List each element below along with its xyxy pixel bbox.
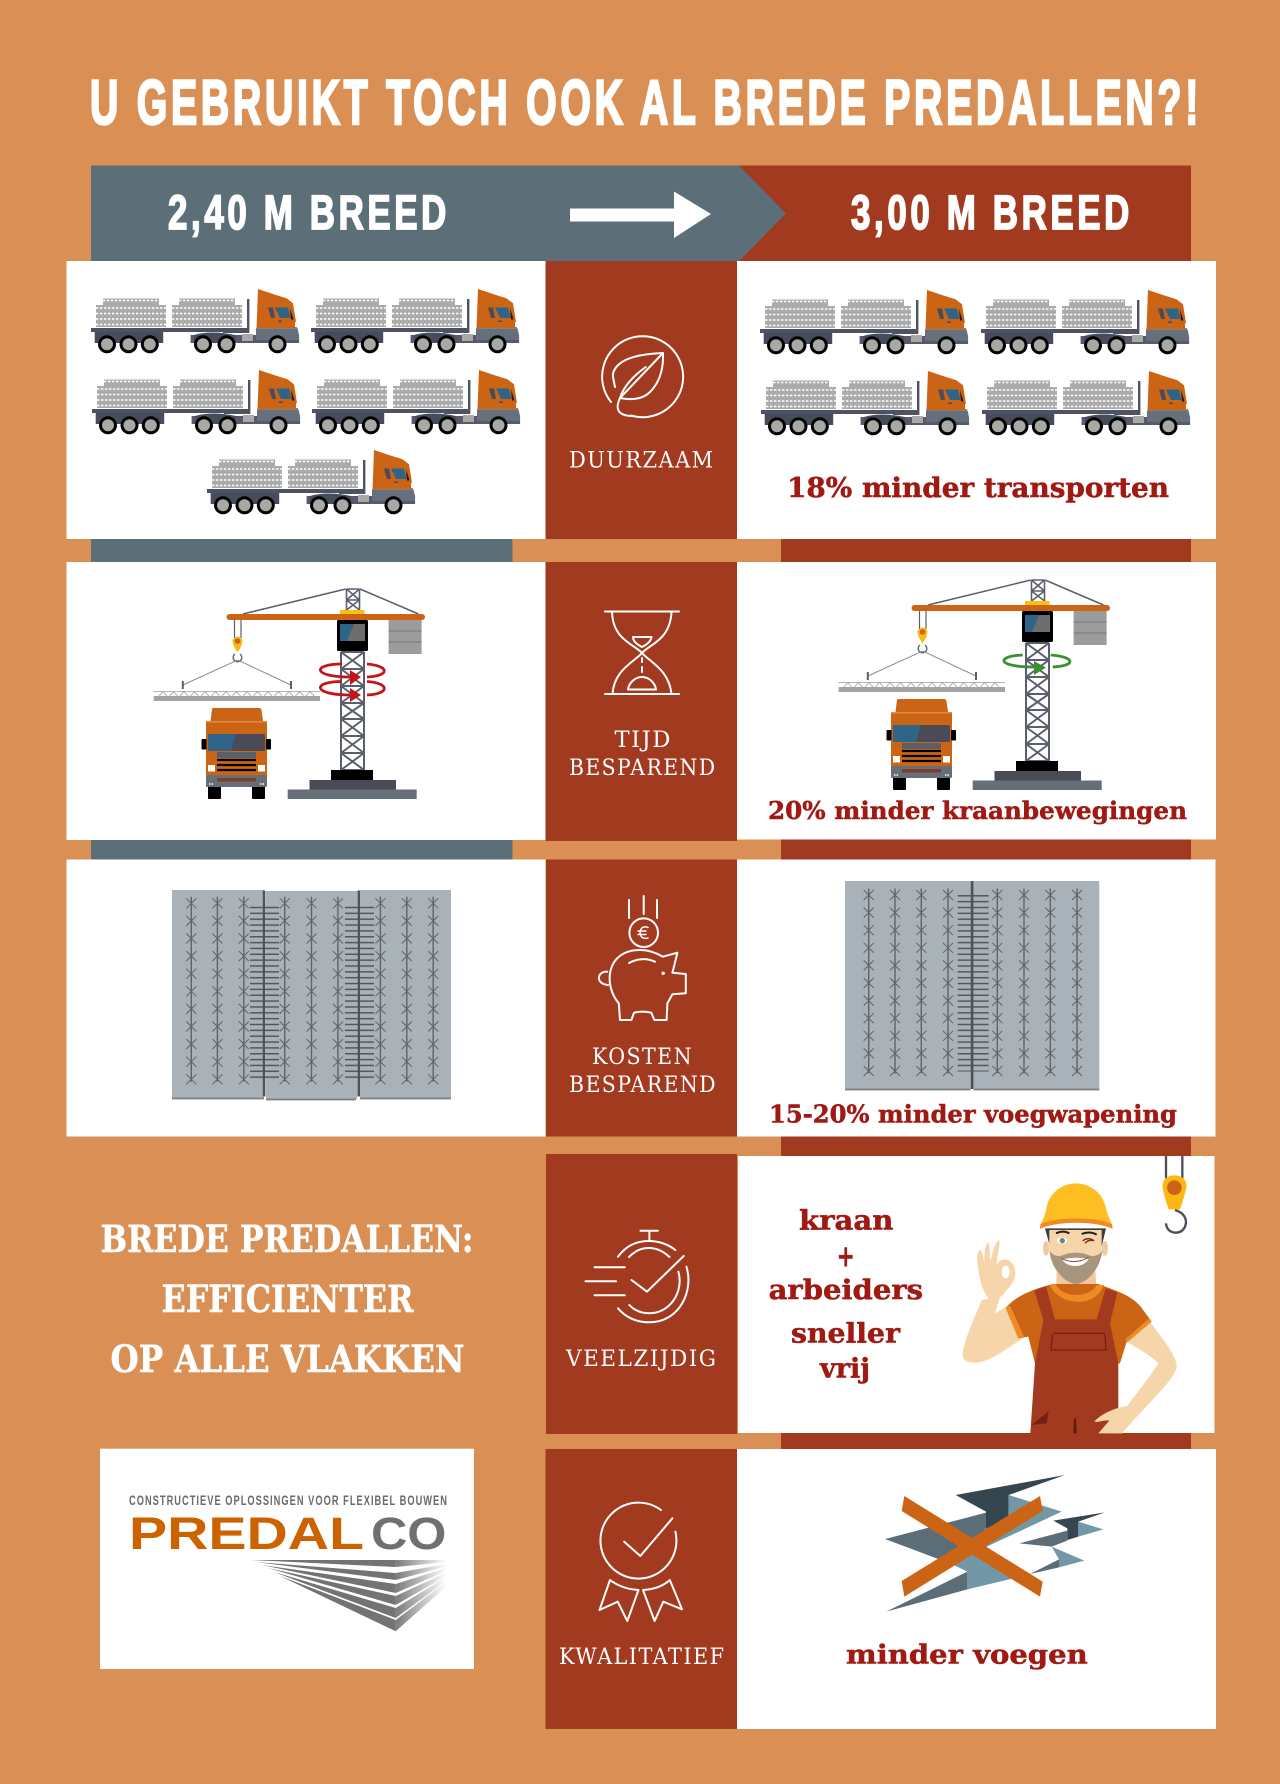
- callout: 18% minder transporten: 18% minder transporten: [787, 472, 1169, 504]
- panel: minder voegen: [737, 1449, 1216, 1729]
- panel: kosten besparend: [546, 860, 737, 1136]
- label: kosten besparend: BESPAREND: [569, 1073, 717, 1098]
- icon: truck 3: [92, 370, 300, 434]
- icon: rotation arrow green: [1004, 655, 1070, 675]
- icon: truck 1: [760, 290, 968, 354]
- text: kraan + arbeiders sneller vrij: vrij: [819, 1354, 870, 1385]
- icon: truck 2: [981, 290, 1190, 354]
- panel: tijd besparend: [546, 562, 737, 841]
- illustration: three slabs with joint reinforcement: [172, 890, 451, 1100]
- icon: logo stacked layers: [251, 1560, 446, 1631]
- panel: 2,40 m joints: [66, 860, 546, 1136]
- label: tijd besparend: [569, 728, 716, 781]
- icon: hourglass: [605, 612, 679, 694]
- heading: brede predallen efficienter: EFFICIENTER: [162, 1277, 414, 1321]
- panel: 3,00 m transports: [737, 261, 1216, 539]
- strip: grey under row 2: [91, 840, 512, 860]
- icon: truck 4: [312, 370, 520, 434]
- illustration: two slabs with joint reinforcement: [845, 881, 1099, 1090]
- illustration: crane and truck: [839, 580, 1110, 790]
- illustration: crack crossed out: [885, 1475, 1105, 1612]
- callout: minder voegen: minder voegen: [846, 1640, 1088, 1670]
- strip: grey under row 1: [91, 539, 512, 562]
- label: kosten besparend: [569, 1045, 717, 1098]
- strip: red under row 4: [781, 1433, 1191, 1449]
- icon: truck 4: [982, 371, 1190, 435]
- callout: 20% minder kraanbewegingen: 20% minder kraanbewegingen: [768, 796, 1187, 825]
- worker figure: [963, 1228, 1177, 1433]
- strip: red under row 2: [781, 839, 1191, 860]
- heading: 3,00 m breed: 3,00 M BREED: [851, 187, 1133, 240]
- panel: 2,40 m transports: [66, 261, 546, 539]
- label: veelzijdig: VEELZIJDIG: [565, 1347, 718, 1372]
- illustration: crane and truck: [154, 589, 425, 799]
- icon: truck 2: [311, 289, 520, 353]
- icon: quality badge: [600, 1503, 682, 1621]
- text: kraan + arbeiders sneller vrij: kraan: [799, 1205, 894, 1236]
- panel: 2,40 m crane: [66, 562, 546, 840]
- panel: duurzaam: [546, 261, 737, 539]
- panel: 3,00 m joints: [737, 860, 1216, 1136]
- label: duurzaam: DUURZAAM: [569, 448, 714, 474]
- panel: kraan + arbeiders sneller vrij: [738, 1156, 1214, 1433]
- icon: truck 5: [207, 450, 416, 514]
- arrow: [570, 192, 711, 238]
- icon: hard hat: [1040, 1183, 1113, 1229]
- icon: truck 1: [91, 289, 300, 353]
- heading: brede predallen efficienter: OP ALLE VLAKKEN: [110, 1337, 464, 1381]
- icon: crane hook: [1162, 1156, 1187, 1233]
- text: predalco logotype: CO: [371, 1508, 446, 1559]
- panel: logo: [100, 1449, 474, 1669]
- heading: brede predallen efficienter: BREDE PREDALLEN:: [100, 1217, 474, 1261]
- text: kraan + arbeiders sneller vrij: [769, 1205, 923, 1385]
- panel: veelzijdig: [546, 1154, 737, 1434]
- panel: kwalitatief: [546, 1449, 737, 1729]
- strip: red under row 1: [781, 539, 1191, 562]
- label: tijd besparend: TIJD: [614, 728, 672, 753]
- text: kraan + arbeiders sneller vrij: +: [837, 1239, 855, 1274]
- text: kraan + arbeiders sneller vrij: sneller: [791, 1319, 901, 1350]
- header band: 2,40 m breed (grey chevron): [91, 166, 786, 261]
- text: kraan + arbeiders sneller vrij: arbeiders: [769, 1275, 923, 1306]
- icon: leaf: [602, 336, 683, 417]
- panel: 3,00 m crane: [737, 562, 1216, 840]
- strip: red under row 3: [781, 1136, 1191, 1156]
- text: tagline: CONSTRUCTIEVE OPLOSSINGEN VOOR FLEXIBEL BOUWEN: [129, 1493, 448, 1508]
- illustration: worker with hook: [963, 1156, 1187, 1433]
- heading: 2,40 m breed: 2,40 M BREED: [168, 187, 450, 240]
- heading: brede predallen efficienter: [100, 1217, 474, 1381]
- text: predalco logotype: [129, 1508, 446, 1559]
- label: tijd besparend: BESPAREND: [569, 756, 716, 781]
- icon: stopwatch: [586, 1231, 688, 1322]
- icon: piggy bank with coin: [599, 896, 686, 1020]
- icon: truck 3: [761, 371, 970, 435]
- callout: 15-20% minder voegwapening: 15-20% minder voegwapening: [769, 1099, 1177, 1128]
- header band: 3,00 m breed (red): [735, 166, 1191, 261]
- icon: rotation arrows red: [320, 664, 384, 702]
- label: kwalitatief: KWALITATIEF: [559, 1645, 726, 1670]
- text: predalco logotype: PREDAL: [129, 1508, 364, 1559]
- label: kosten besparend: KOSTEN: [592, 1045, 693, 1070]
